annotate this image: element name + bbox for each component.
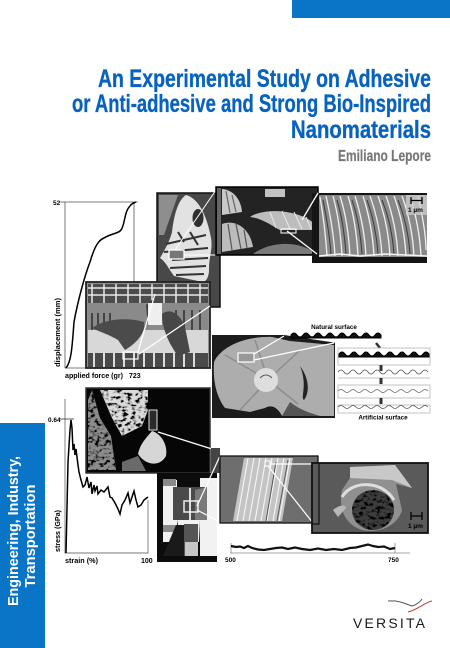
chart: stress vs strain xyxy=(48,399,153,565)
panel: SEM setae with scale bar xyxy=(287,193,427,263)
chart: stress vs strain: stress (GPa) xyxy=(55,510,62,552)
chart: flat line: 750 xyxy=(388,557,399,564)
logo: Versita: VERSITA xyxy=(353,615,426,631)
chart: stress vs strain: strain (%) xyxy=(65,558,98,565)
chart: stress vs strain: 0.64 xyxy=(48,417,61,424)
chart: flat line: 500 xyxy=(225,557,236,564)
top blue bar xyxy=(292,0,450,18)
chart: stress vs strain: 100 xyxy=(141,558,153,565)
panel: SEM fibre end with scale bar xyxy=(312,463,428,533)
panel: SEM setae with scale bar: 1 µm xyxy=(408,207,423,214)
chart: flat line xyxy=(225,543,410,564)
title xyxy=(72,65,431,144)
category label: Transportation xyxy=(22,484,39,588)
panel: SEM fibre end with scale bar: 1 µm xyxy=(408,523,423,530)
panel: lotus leaf xyxy=(212,335,337,418)
chart: displacement vs applied force: applied force (gr) xyxy=(65,373,123,380)
category label xyxy=(5,456,39,606)
logo: Versita xyxy=(353,599,432,631)
diagram: natural to artificial surface xyxy=(291,324,430,422)
panel: SEM lamellae xyxy=(216,187,318,255)
chart: displacement vs applied force xyxy=(53,200,141,380)
panel: SEM fibre xyxy=(220,456,318,523)
chart: displacement vs applied force: 723 xyxy=(129,373,141,380)
panel: tensile test device xyxy=(157,448,220,562)
chart: displacement vs applied force: displacement (mm) xyxy=(55,298,62,367)
panel: feathered gecko foot photo xyxy=(157,190,220,307)
category label: Engineering, Industry, xyxy=(5,456,22,606)
panel: spider photo xyxy=(86,388,212,473)
diagram: natural to artificial surface: Natural surface xyxy=(311,324,357,331)
diagram: natural to artificial surface: Artificial surface xyxy=(358,414,408,422)
left blue band xyxy=(0,423,45,648)
panel: gecko photo xyxy=(86,282,210,368)
chart: displacement vs applied force: 52 xyxy=(53,200,61,207)
